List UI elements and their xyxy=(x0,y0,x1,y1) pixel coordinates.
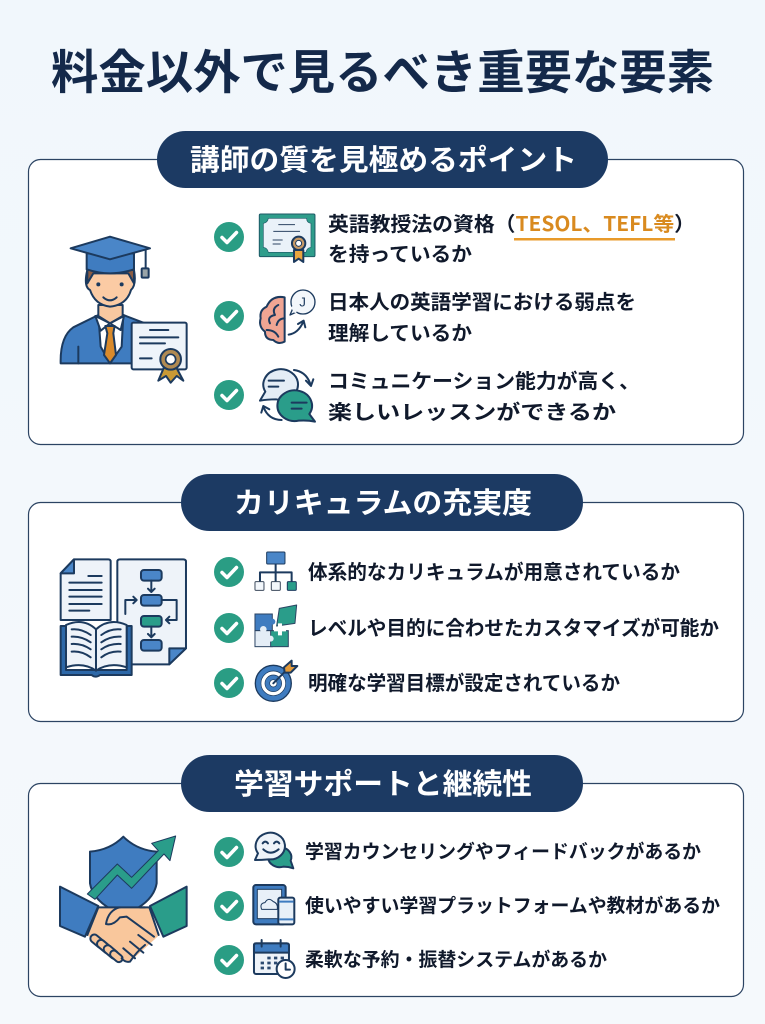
heading: teacher quality: 講師の質を見極めるポイント xyxy=(190,144,577,177)
item text 5: レベルや目的に合わせたカスタマイズが可能か xyxy=(308,616,719,640)
item text 2: 日本人の英語学習における弱点を xyxy=(328,291,636,314)
icon: smiling chat bubbles xyxy=(255,833,293,868)
item text 2: 理解しているか xyxy=(328,322,472,345)
icon: puzzle xyxy=(255,605,297,647)
item text 9: 柔軟な予約・振替システムがあるか xyxy=(305,948,607,971)
check item 3 xyxy=(214,380,244,410)
panel: teacher quality xyxy=(28,131,744,444)
item text 1: を持っているか xyxy=(328,243,472,266)
item text 8: 使いやすい学習プラットフォームや教材があるか xyxy=(305,894,720,917)
panel: curriculum xyxy=(28,474,744,722)
icon: certificate xyxy=(259,214,315,262)
icon: documents, flowchart and book xyxy=(61,559,186,677)
heading: curriculum xyxy=(181,474,583,531)
icon: hierarchy xyxy=(255,552,296,590)
icon: brain with J bubble xyxy=(260,290,315,343)
heading: curriculum: カリキュラムの充実度 xyxy=(234,487,532,520)
item text 3: 楽しいレッスンができるか xyxy=(328,400,616,424)
check item 2 xyxy=(214,301,244,331)
check item 3 xyxy=(214,668,244,698)
item text 3 xyxy=(328,369,640,424)
panel: learning support xyxy=(28,755,744,996)
item text 7: 学習カウンセリングやフィードバックがあるか xyxy=(305,840,701,863)
icon: graduate with diploma xyxy=(61,237,187,383)
item text 4: 体系的なカリキュラムが用意されているか xyxy=(308,560,680,584)
icon: brain with J bubble: J xyxy=(299,295,306,310)
check item 2 xyxy=(214,613,244,643)
title: 料金以外で見るべき重要な要素 xyxy=(51,46,714,99)
heading: learning support: 学習サポートと継続性 xyxy=(234,768,532,801)
item text 1 xyxy=(328,208,695,266)
icon: tablet and phone with cloud xyxy=(253,885,294,924)
heading: teacher quality xyxy=(157,131,608,188)
icon: calendar and clock xyxy=(254,940,295,978)
check item 1 xyxy=(214,557,244,587)
icon: shield, growth arrow and handshake xyxy=(60,836,187,964)
item text 2 xyxy=(328,291,636,345)
item text 6: 明確な学習目標が設定されているか xyxy=(308,671,620,695)
icon: target with arrow xyxy=(255,661,297,701)
item text 3: コミュニケーション能力が高く、 xyxy=(328,369,640,393)
check item 2 xyxy=(214,891,244,921)
check item 1 xyxy=(214,837,244,867)
check item 3 xyxy=(214,945,244,975)
fingers xyxy=(89,933,124,964)
heading: learning support xyxy=(181,755,583,812)
item text 1: 英語教授法の資格（ TESOL、TEFL等 ） xyxy=(328,208,695,237)
check item 1 xyxy=(214,222,244,252)
icon: conversation bubbles xyxy=(260,369,315,422)
